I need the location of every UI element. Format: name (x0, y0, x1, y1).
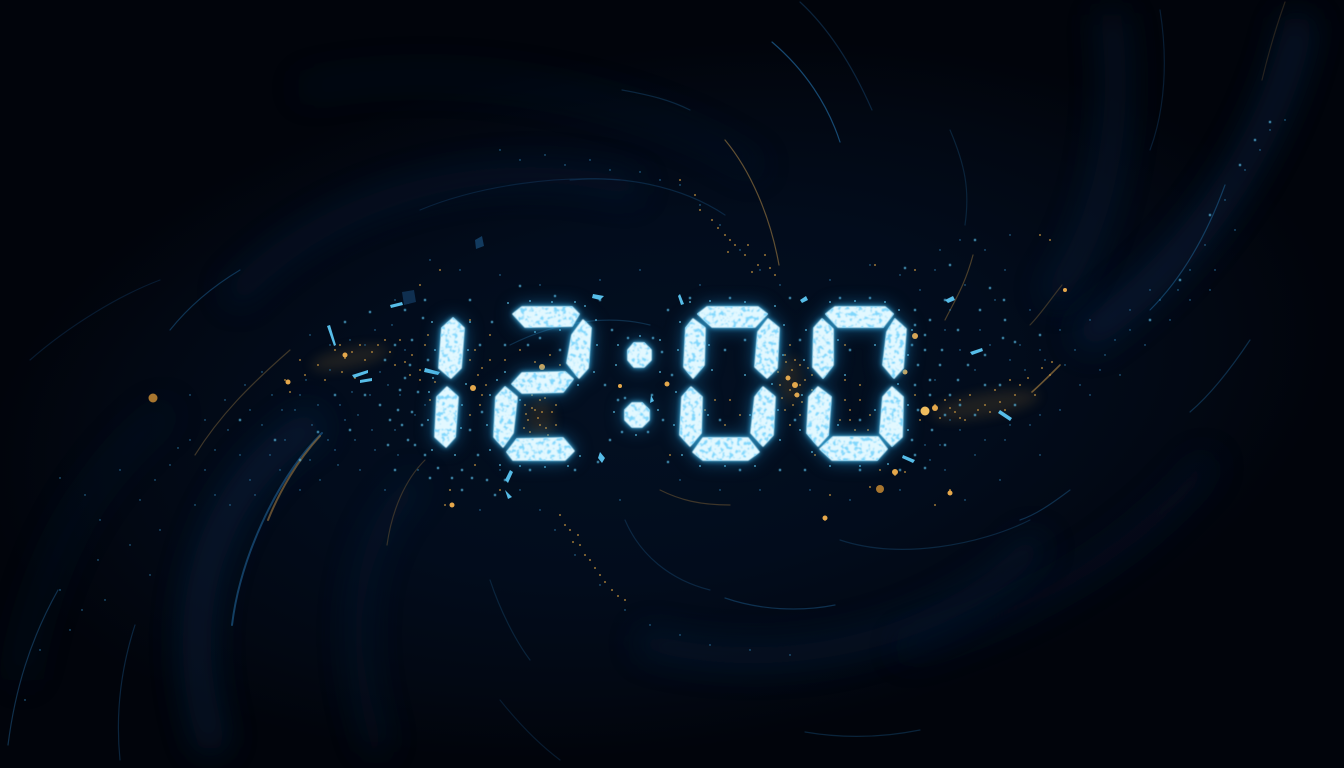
particles: bright blue specks (240, 122, 1270, 495)
particles: faint blue dust (25, 120, 1285, 700)
particles: specks hugging the digits (428, 301, 912, 467)
digit 2 (494, 307, 591, 460)
particles: soft gold haze (309, 340, 1041, 442)
clock digits: 12:00 (435, 307, 906, 460)
digit 0 (minutes) (807, 307, 906, 460)
colon (625, 343, 651, 427)
particles: gold specks (285, 180, 1065, 600)
particles: blue shards (327, 236, 1012, 499)
digit 1 (435, 318, 464, 447)
particles: large gold glints (148, 288, 1067, 520)
digit 0 (tens of minutes) (680, 307, 779, 460)
